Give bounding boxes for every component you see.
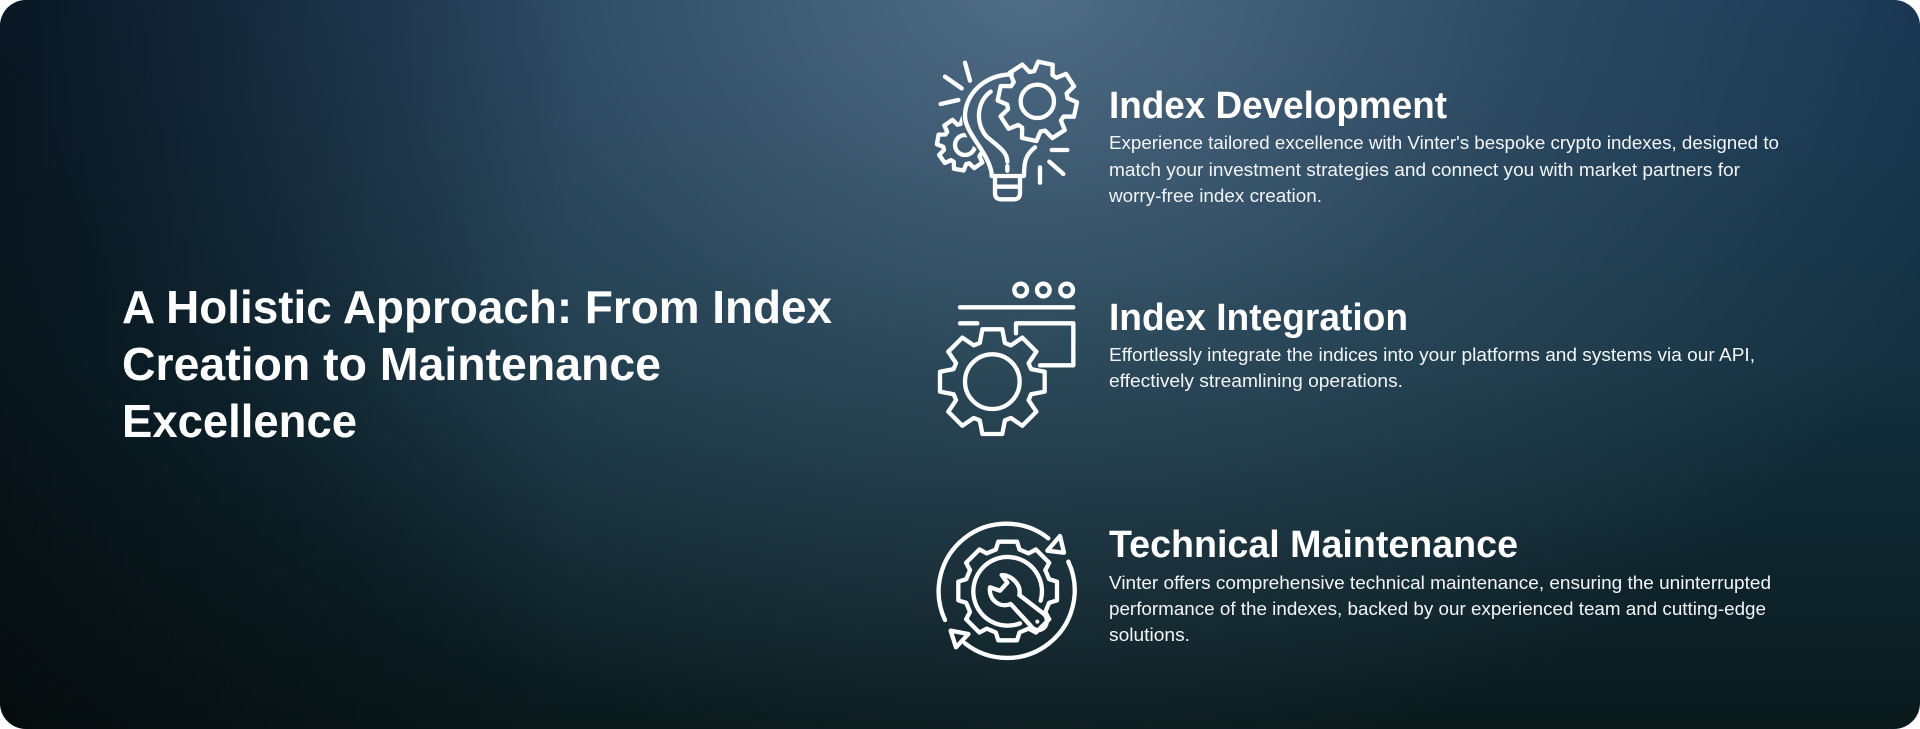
text: index development: worry-free index creation. — [1108, 186, 1322, 206]
icon: wrench in gear with cycle arrows — [939, 524, 1075, 658]
title: Creation to Maintenance — [122, 338, 661, 390]
title: A Holistic Approach: From Index — [122, 281, 832, 333]
icon: gear with browser window — [940, 284, 1073, 434]
text: index development: match your investment strategies and connect you with market partners for — [1109, 160, 1740, 180]
text: index development: Experience tailored excellence with Vinter's bespoke crypto indexes, designed to — [1109, 133, 1779, 153]
icon: light bulb with gears — [933, 55, 1084, 199]
text: index integration: effectively streamlining operations. — [1109, 371, 1403, 391]
text: technical maintenance — [1109, 524, 1771, 645]
title: Excellence — [122, 395, 357, 447]
text: index development: Index Development — [1109, 85, 1447, 127]
text: index integration: Index Integration — [1109, 297, 1408, 339]
text: index development — [1108, 85, 1779, 206]
text: technical maintenance: solutions. — [1109, 625, 1190, 645]
text: index integration — [1109, 297, 1755, 391]
text: technical maintenance: performance of the indexes, backed by our experienced team and cutting-edge — [1109, 599, 1766, 619]
text: technical maintenance: Technical Maintenance — [1109, 524, 1518, 566]
text: index integration: Effortlessly integrate the indices into your platforms and systems via our API, — [1109, 345, 1755, 365]
text: technical maintenance: Vinter offers comprehensive technical maintenance, ensuring the uninterrupted — [1109, 573, 1771, 593]
title — [122, 281, 832, 447]
